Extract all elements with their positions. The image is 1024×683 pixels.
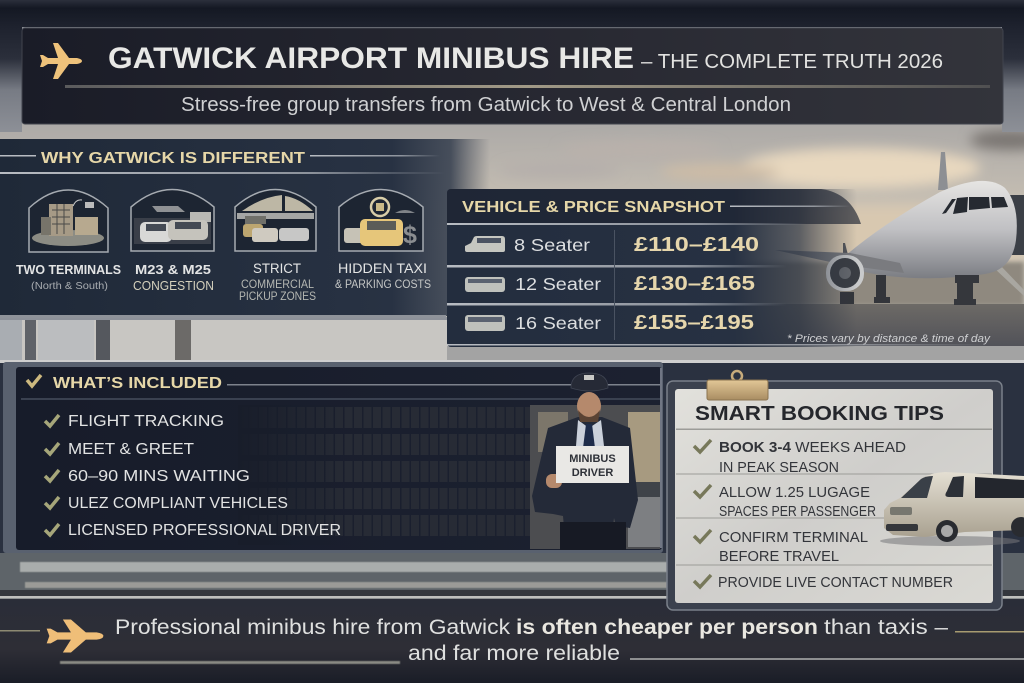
icon: plane <box>47 619 103 653</box>
sign <box>556 446 629 483</box>
checklist: LICENSED PROFESSIONAL DRIVER <box>68 522 341 539</box>
checklist: 60–90 MINS WAITING <box>68 468 250 485</box>
row: 16 seater: 16 Seater <box>515 313 601 333</box>
heading: WHY GATWICK IS DIFFERENT <box>41 150 306 167</box>
panel: bottom footer <box>0 599 1024 683</box>
tip text: BEFORE TRAVEL <box>719 548 839 565</box>
panel: vehicle and price snapshot <box>447 189 992 347</box>
row: 12 seater <box>465 273 755 295</box>
checklist: ULEZ COMPLIANT VEHICLES <box>68 495 288 512</box>
photo: parked airliner <box>447 152 1024 361</box>
top strip <box>0 0 1024 27</box>
checks <box>694 440 711 587</box>
title: GATWICK AIRPORT MINIBUS HIRE <box>108 42 634 75</box>
checklist <box>45 413 341 539</box>
row: 8 seater: 8 Seater <box>514 235 590 255</box>
labels: CONGESTION <box>133 279 214 293</box>
closing statement: Professional minibus hire from Gatwick <box>115 615 510 639</box>
icon: plane <box>40 43 82 79</box>
panel: what's included <box>3 362 663 553</box>
tip text: IN PEAK SEASON <box>719 459 839 476</box>
row: 16 seater: £155–£195 <box>634 312 754 334</box>
window frame backdrop <box>0 317 1024 363</box>
icon: hidden taxi costs: $ <box>403 221 417 249</box>
sign: MINIBUS <box>569 453 616 465</box>
tip text: CONFIRM TERMINAL <box>719 529 868 546</box>
checklist: FLIGHT TRACKING <box>68 413 224 430</box>
row: 16 seater <box>465 312 754 334</box>
panel: why Gatwick is different <box>0 139 490 318</box>
closing statement: and far more reliable <box>408 641 620 665</box>
labels <box>16 261 431 303</box>
labels: STRICT <box>253 261 301 276</box>
icon: two terminals <box>29 190 108 252</box>
icon: hidden taxi costs <box>339 190 423 251</box>
heading: VEHICLE & PRICE SNAPSHOT <box>462 199 726 216</box>
heading: WHAT’S INCLUDED <box>53 375 222 392</box>
labels: M23 & M25 <box>135 262 211 277</box>
footnote: * Prices vary by distance & time of day <box>787 333 992 345</box>
tip text <box>718 439 953 591</box>
closing statement: than taxis – <box>824 615 948 639</box>
sign: DRIVER <box>572 467 613 479</box>
checklist: MEET & GREET <box>68 441 195 458</box>
closing statement: is often cheaper per person <box>516 615 818 639</box>
tip text: BOOK 3-4 WEEKS AHEAD <box>719 439 906 456</box>
labels: TWO TERMINALS <box>16 263 121 277</box>
row: 12 seater: £130–£165 <box>634 273 755 295</box>
row: 12 seater: 12 Seater <box>515 274 601 294</box>
row: 8 seater: £110–£140 <box>634 234 759 256</box>
illustration: minibus driver <box>532 373 638 550</box>
row: 8 seater <box>465 234 759 256</box>
panel: title banner <box>22 28 1003 124</box>
subtitle: Stress-free group transfers from Gatwick to West & Central London <box>181 94 791 116</box>
heading: SMART BOOKING TIPS <box>695 403 944 425</box>
labels: & PARKING COSTS <box>335 279 431 291</box>
title suffix: – THE COMPLETE TRUTH 2026 <box>641 51 943 73</box>
labels: (North & South) <box>31 280 108 292</box>
tip text: PROVIDE LIVE CONTACT NUMBER <box>718 574 953 591</box>
icon: pickup zones <box>235 190 316 251</box>
closing statement <box>115 615 948 665</box>
tip text: SPACES PER PASSENGER <box>719 503 876 520</box>
labels: PICKUP ZONES <box>239 291 316 303</box>
panel: smart booking tips <box>667 371 1024 610</box>
clipboard clip <box>707 371 768 400</box>
illustration: minibus van <box>880 472 1024 546</box>
labels: COMMERCIAL <box>241 279 315 291</box>
labels: HIDDEN TAXI <box>338 261 427 276</box>
icon: motorway congestion <box>131 190 214 251</box>
departure board texture <box>238 405 532 545</box>
tip text: ALLOW 1.25 LUGAGE <box>719 484 870 501</box>
lower scene band <box>0 360 1024 600</box>
